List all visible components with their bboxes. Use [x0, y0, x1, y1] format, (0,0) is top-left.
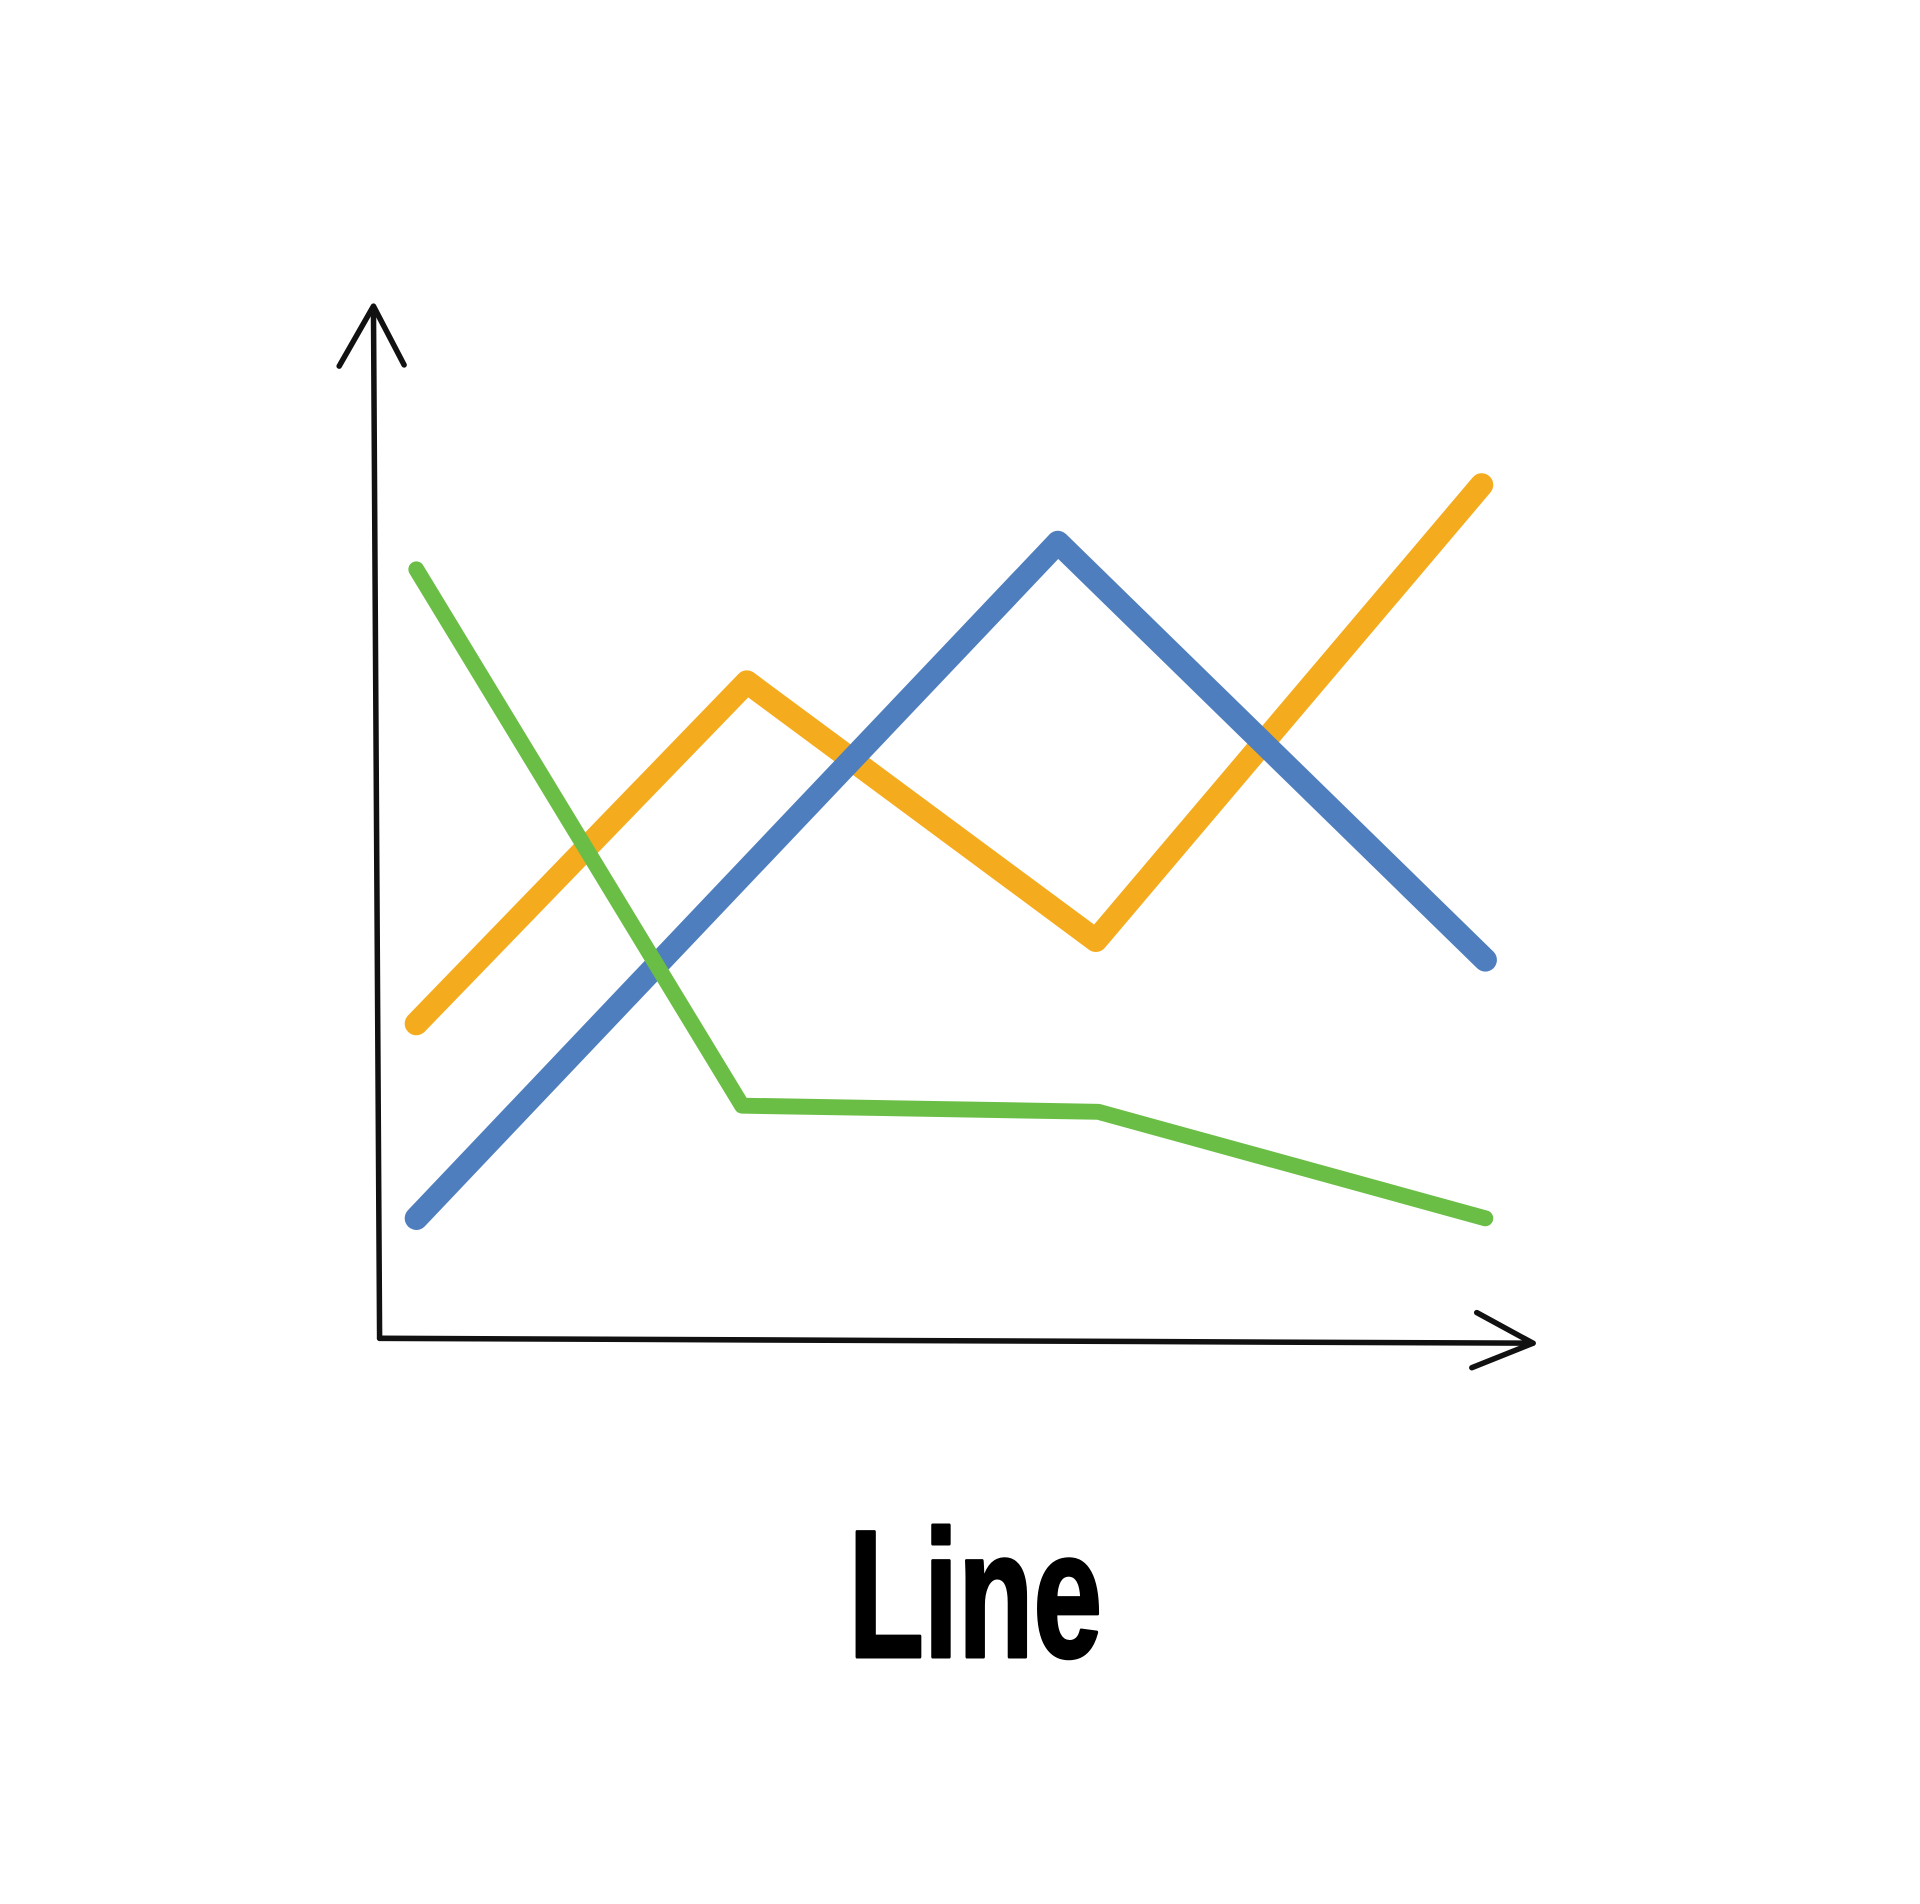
y axis with arrow	[339, 306, 404, 1338]
orange series line	[416, 485, 1482, 1024]
x axis with arrow	[380, 1313, 1533, 1368]
green series line	[416, 569, 1485, 1218]
blue series line	[416, 542, 1485, 1218]
caption: Line: Line	[849, 1494, 1102, 1696]
